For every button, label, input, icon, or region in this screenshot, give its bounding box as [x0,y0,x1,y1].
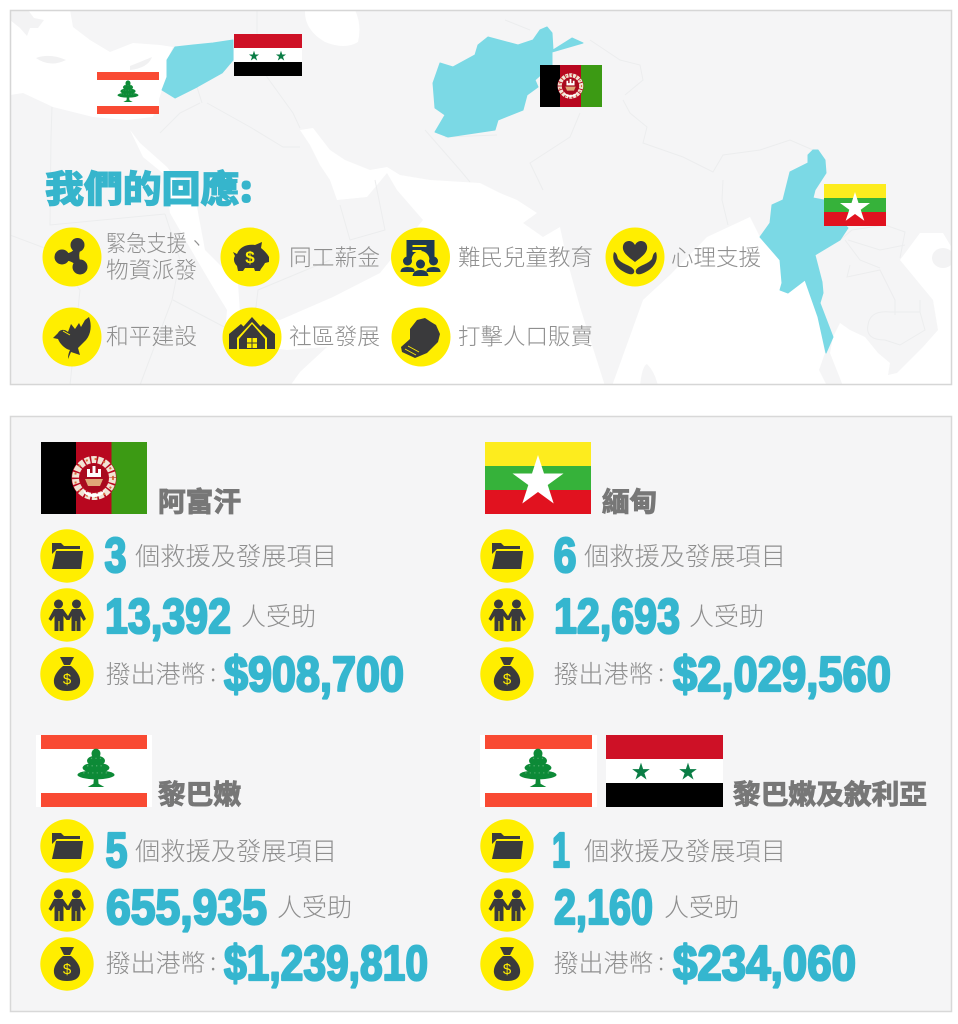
response item: anti-trafficking [392,308,593,366]
icon: money bag [480,647,534,701]
icon: money bag [40,937,94,991]
stat: projects: 個救援及發展項目 [135,832,337,868]
response item: staff salaries [220,228,380,286]
stat: funds: 撥出港幣 [554,944,654,980]
flag: Syria: ★ [631,762,651,783]
flag: Syria on map [234,34,302,76]
stat: projects [554,529,786,583]
stat: people helped: 人受助 [689,597,764,633]
label: peacebuilding: 和平建設 [106,320,197,352]
icon: people [40,588,94,642]
label: emergency relief: 物資派發 [106,253,197,285]
icon: money bag: $ [503,961,512,978]
icon: people [480,878,534,932]
section: Afghanistan [40,442,404,702]
stat: funds: 撥出港幣 [554,655,654,691]
stat: projects: 5 [106,824,128,878]
icon: folder [480,529,534,583]
flag: Lebanon [480,735,597,807]
label: anti-trafficking: 打擊人口販賣 [458,320,593,352]
stat: funds: : [210,653,216,689]
section: Lebanon and Syria [480,735,927,991]
stat: people helped: 人受助 [277,888,352,924]
stat: people helped: 人受助 [664,888,739,924]
flag: Afghanistan on map [540,65,602,107]
icon: heart in hands [606,228,664,286]
section: Lebanon [36,735,428,991]
flag: Syria [606,735,723,807]
stat: people helped: 12,693 [554,590,680,644]
map: Myanmar highlighted [760,150,848,353]
icon: money bag: $ [63,671,72,688]
flag: Syria on map: ★ [248,50,260,62]
icon: fist [392,308,450,366]
icon: folder [480,819,534,873]
stat: funds [106,937,428,991]
stat: funds: $234,060 [673,937,856,991]
icon: dove [42,308,102,366]
label: emergency relief [106,226,207,285]
stat: projects: 個救援及發展項目 [584,832,786,868]
stat: funds: : [658,653,664,689]
stat: projects [552,824,786,878]
icon: people [40,878,94,932]
response item: refugee children education [391,228,593,286]
flag: Myanmar on map [824,184,886,226]
stat: funds [554,648,891,702]
label: psychological support: 心理支援 [671,240,761,272]
flag: Myanmar [485,442,591,514]
stat: funds: : [210,942,216,978]
title: 我們的回應: [45,159,253,213]
stat: projects: 個救援及發展項目 [584,537,786,573]
stat: projects: 3 [104,529,126,583]
heading: Afghanistan: 阿富汗 [158,480,241,520]
stat: funds: : [658,942,664,978]
stat: people helped: 655,935 [106,881,267,935]
flag: Afghanistan [41,442,147,514]
label: emergency relief: 緊急支援、 [106,226,207,258]
stat: funds [106,648,404,702]
stat: funds: 撥出港幣 [106,944,206,980]
stat: funds: $908,700 [224,648,404,702]
panel: map background [10,10,954,386]
map: Syria highlighted [162,40,233,98]
heading: Myanmar: 緬甸 [602,480,657,520]
icon: folder [40,819,94,873]
stat: projects: 1 [552,824,570,878]
heading: Lebanon: 黎巴嫩 [158,773,241,812]
label: refugee children education: 難民兒童教育 [458,240,593,272]
flag: Lebanon [36,735,152,807]
icon: money bag [40,647,94,701]
panel: country results [10,416,952,1012]
flag: Lebanon on map [97,72,159,114]
response item: psychological support [606,228,761,286]
icon: piggy bank: $ [245,248,255,267]
icon: education [391,228,450,286]
stat: projects: 6 [554,529,576,583]
icon: money bag [480,937,534,991]
stat: people helped: 人受助 [241,597,316,633]
stat: projects [106,824,337,878]
stat: funds: $1,239,810 [224,937,428,991]
stat: projects: 個救援及發展項目 [135,537,337,573]
label: community development: 社區發展 [289,320,380,352]
icon: emergency relief [42,228,102,286]
icon: money bag: $ [63,961,72,978]
stat: funds: $2,029,560 [673,648,891,702]
heading: Lebanon and Syria: 黎巴嫩及敘利亞 [733,773,927,812]
icon: house with hands [222,308,282,366]
response item: emergency relief [42,226,207,286]
stat: people helped: 2,160 [554,881,653,935]
stat: projects [104,529,337,583]
icon: piggy bank [220,228,280,286]
icon: money bag: $ [503,671,512,688]
stat: funds [554,937,856,991]
label: staff salaries: 同工薪金 [289,240,380,272]
map: Afghanistan highlighted [433,27,583,137]
stat: people helped [554,881,739,935]
stat: people helped: 13,392 [105,590,231,644]
icon: people [480,588,534,642]
section: Myanmar [480,442,891,702]
flag: Syria: ★ [678,762,698,783]
response item: peacebuilding [42,308,197,366]
stat: funds: 撥出港幣 [106,655,206,691]
icon: folder [40,529,94,583]
flag: Syria on map: ★ [276,50,286,62]
response item: community development [222,308,380,366]
